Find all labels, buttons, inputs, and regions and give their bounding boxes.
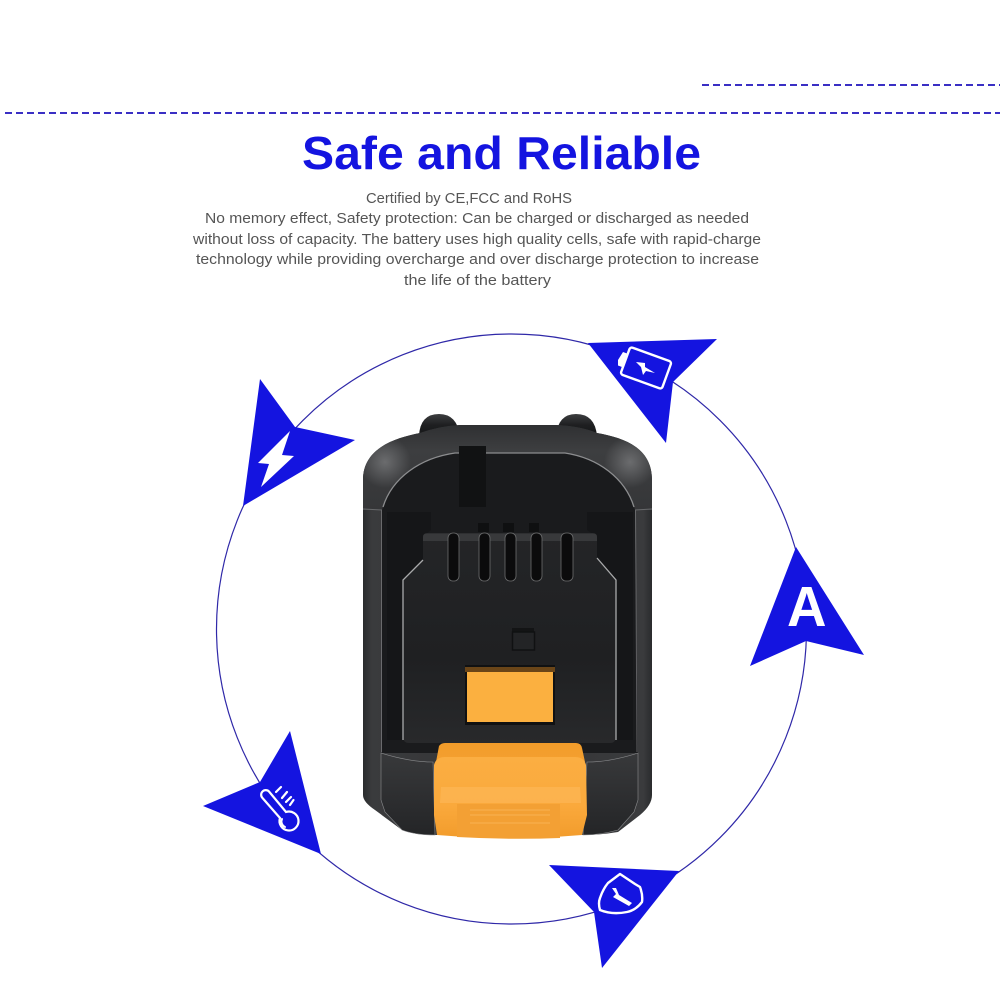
arch highlight [383,453,634,507]
plate top ledge [423,534,597,541]
right lower block [583,753,638,835]
icon: thermometer [261,787,299,831]
arrow: ampere [750,547,864,666]
icon: lightning bolt [258,431,294,487]
description text block: technology while providing overcharge and over discharge protection to increase [196,252,759,268]
icon: battery [618,347,672,389]
connector slots [448,533,573,581]
shell top shoulder [363,425,652,510]
battery cavity [382,453,638,753]
description text block: No memory effect, Safety protection: Can be charged or discharged as needed [205,211,749,227]
slot top notches [478,523,539,532]
top latch stripe [459,446,486,507]
left lower block [381,753,435,835]
right recess [587,512,633,740]
latch knobs [419,414,597,436]
description text block [192,191,761,289]
arrow: shield [549,865,679,968]
side rail highlights [363,509,652,752]
orange release button [465,665,555,725]
battery product [359,414,656,839]
plate edge highlights [403,558,616,740]
description text block: the life of the battery [404,273,552,289]
connector plate [403,533,616,743]
title: Safe and Reliable [302,127,701,179]
small square mark [512,628,534,650]
arrow: temperature [203,731,321,854]
battery outer shell [363,425,652,835]
shoulder highlights [364,441,650,484]
orange lever [434,743,587,839]
arrow: lightning bolt [243,379,355,506]
lever grip [457,804,560,839]
full width dashed line [5,112,1000,114]
arrow: battery charge [588,339,717,443]
description text block: without loss of capacity. The battery uses high quality cells, safe with rapid-charge [192,232,761,248]
description text block: Certified by CE,FCC and RoHS [366,191,572,207]
grip lines [470,810,550,823]
top right dashed line [702,84,1000,86]
left recess [387,512,431,740]
circular cycle ring [216,334,806,924]
icon: shield [599,874,642,913]
lever ridge [440,787,581,803]
icon: letter A: A [787,575,826,639]
